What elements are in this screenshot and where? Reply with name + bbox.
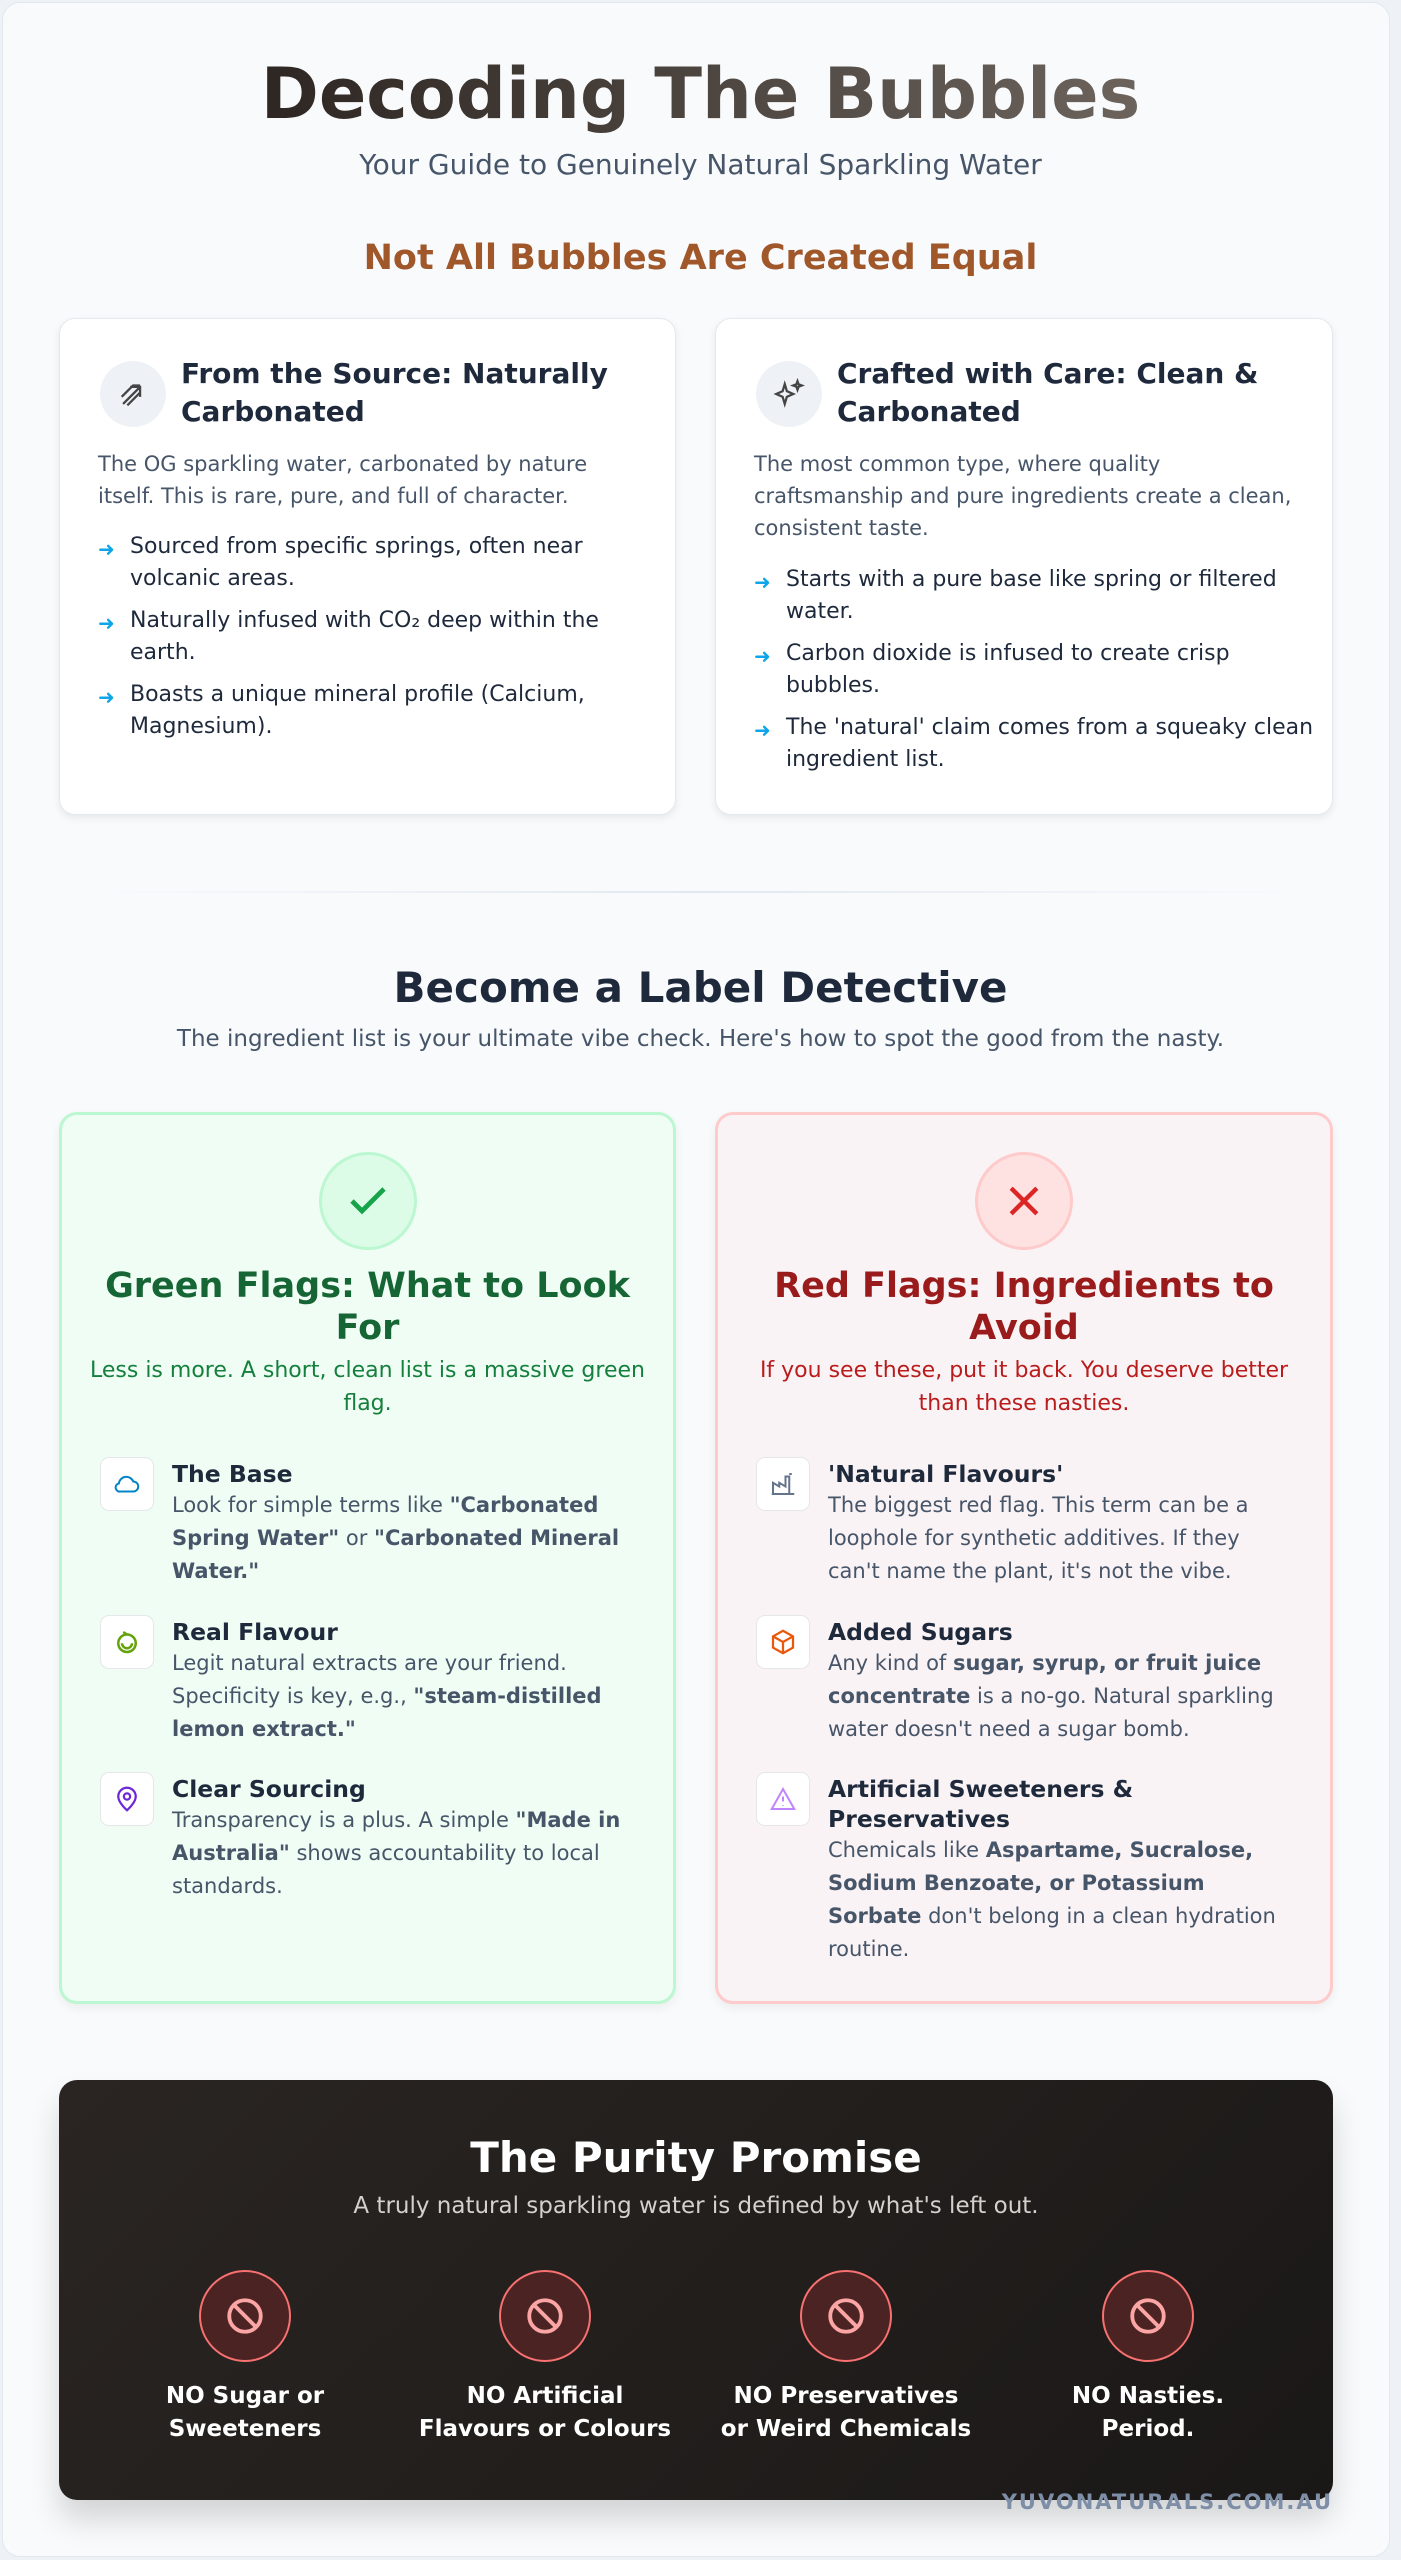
subtitle: A truly natural sparkling water is defined by what's left out. <box>353 2193 1039 2219</box>
bullet list: Boasts a unique mineral profile (Calcium, Magnesium). <box>130 682 585 739</box>
heading: Green Flags: What to Look <box>105 1266 630 1306</box>
panel: green flags <box>59 1112 676 2004</box>
promise: no preservatives: NO Preservatives <box>734 2383 958 2409</box>
bullet list: ➜ <box>98 537 115 561</box>
icon: check <box>319 1152 417 1250</box>
promise: no nasties: NO Nasties. <box>1072 2383 1224 2409</box>
bullet list: Starts with a pure base like spring or filtered water. <box>786 567 1277 624</box>
item: natural flavours <box>756 1457 1249 1583</box>
icon: ban <box>800 2270 892 2362</box>
icon: sparkles <box>756 361 822 427</box>
promise: no nasties <box>1072 2270 1224 2442</box>
promise: no sugar <box>166 2270 324 2442</box>
item: natural flavours: 'Natural Flavours' <box>828 1460 1063 1488</box>
description: The most common type, where quality craftsmanship and pure ingredients create a clean, consistent taste. <box>754 452 1291 540</box>
bullet list: Carbon dioxide is infused to create crisp bubbles. <box>786 641 1230 698</box>
item: sweeteners and preservatives <box>756 1772 1276 1961</box>
footer: website: YUVONATURALS.COM.AU <box>1002 2490 1333 2514</box>
promise: no preservatives: or Weird Chemicals <box>721 2416 971 2442</box>
icon: warning <box>756 1772 810 1826</box>
promise: no sugar: NO Sugar or <box>166 2383 324 2409</box>
heading <box>774 1266 1274 1348</box>
bullet list <box>98 534 599 739</box>
bullet list: ➜ <box>754 644 771 668</box>
bullet list: Naturally infused with CO₂ deep within the earth. <box>130 608 599 665</box>
item: natural flavours: The biggest red flag. This term can be a loophole for synthetic additives. If they can't name the plant, it's not the vibe. <box>828 1493 1249 1583</box>
section subtitle: The ingredient list is your ultimate vibe check. Here's how to spot the good from the nasty. <box>177 1026 1224 1052</box>
bullet list <box>754 567 1313 772</box>
item: real flavour: Legit natural extracts are your friend. Specificity is key, e.g., "steam-distilled lemon extract." <box>172 1651 602 1741</box>
item: sweeteners and preservatives: Artificial Sweeteners & Preservatives <box>828 1775 1133 1833</box>
item: added sugars: Added Sugars <box>828 1618 1013 1646</box>
bullet list: ➜ <box>98 685 115 709</box>
item: added sugars <box>756 1615 1274 1741</box>
icon: ban <box>499 2270 591 2362</box>
item: the base: The Base <box>172 1460 293 1488</box>
item: sweeteners and preservatives: Chemicals like Aspartame, Sucralose, Sodium Benzoate, or Potassium Sorbate don't belong in a clean hydration routine. <box>828 1838 1276 1961</box>
section heading: bubbles: Not All Bubbles Are Created Equal <box>364 238 1037 278</box>
icon: cloud <box>100 1457 154 1511</box>
item: clear sourcing: Clear Sourcing <box>172 1775 366 1803</box>
item: clear sourcing: Transparency is a plus. A simple "Made in Australia" shows accountability to local standards. <box>172 1808 620 1898</box>
item: the base <box>100 1457 619 1583</box>
heading: The Purity Promise <box>470 2133 922 2182</box>
item: clear sourcing <box>100 1772 620 1898</box>
bullet list: ➜ <box>98 611 115 635</box>
subtitle: If you see these, put it back. You deserve better than these nasties. <box>760 1358 1288 1416</box>
panel: red flags <box>715 1112 1333 2004</box>
icon: ban <box>199 2270 291 2362</box>
title: Decoding The Bubbles <box>261 53 1140 135</box>
bullet list: ➜ <box>754 570 771 594</box>
icon: location pin <box>100 1772 154 1826</box>
heading: For <box>336 1308 399 1348</box>
icon: ban <box>1102 2270 1194 2362</box>
subtitle: Your Guide to Genuinely Natural Sparkling Water <box>359 148 1042 181</box>
heading: Red Flags: Ingredients to <box>774 1266 1274 1306</box>
heading: Crafted with Care: Clean & Carbonated <box>837 357 1258 428</box>
panel: purity promise <box>59 2080 1333 2500</box>
item: real flavour <box>100 1615 602 1741</box>
bullet list: Sourced from specific springs, often near volcanic areas. <box>130 534 583 591</box>
icon: arrows up <box>100 361 166 427</box>
bullet list: ➜ <box>754 718 771 742</box>
promise: no artificial: NO Artificial <box>467 2383 623 2409</box>
promise: no preservatives <box>721 2270 971 2442</box>
item: the base: Look for simple terms like "Carbonated Spring Water" or "Carbonated Mineral Water." <box>172 1493 619 1583</box>
section heading: label detective: Become a Label Detective <box>394 963 1007 1012</box>
heading <box>105 1266 630 1348</box>
heading: From the Source: Naturally Carbonated <box>181 357 608 428</box>
item: added sugars: Any kind of sugar, syrup, or fruit juice concentrate is a no-go. Natural sparkling water doesn't need a sugar bomb. <box>828 1651 1274 1741</box>
icon: cross <box>975 1152 1073 1250</box>
heading: Avoid <box>969 1308 1079 1348</box>
promise: no nasties: Period. <box>1102 2416 1194 2442</box>
promise: no artificial: Flavours or Colours <box>419 2416 671 2442</box>
icon: cube <box>756 1615 810 1669</box>
card: naturally carbonated <box>59 318 676 815</box>
card: crafted with care <box>715 318 1333 815</box>
bullet list: The 'natural' claim comes from a squeaky clean ingredient list. <box>786 715 1313 772</box>
icon: factory <box>756 1457 810 1511</box>
description: The OG sparkling water, carbonated by nature itself. This is rare, pure, and full of character. <box>98 452 587 508</box>
subtitle: Less is more. A short, clean list is a massive green flag. <box>90 1358 645 1416</box>
promise: no sugar: Sweeteners <box>169 2416 321 2442</box>
promise: no artificial <box>419 2270 671 2442</box>
icon: lemon <box>100 1615 154 1669</box>
item: real flavour: Real Flavour <box>172 1618 338 1646</box>
